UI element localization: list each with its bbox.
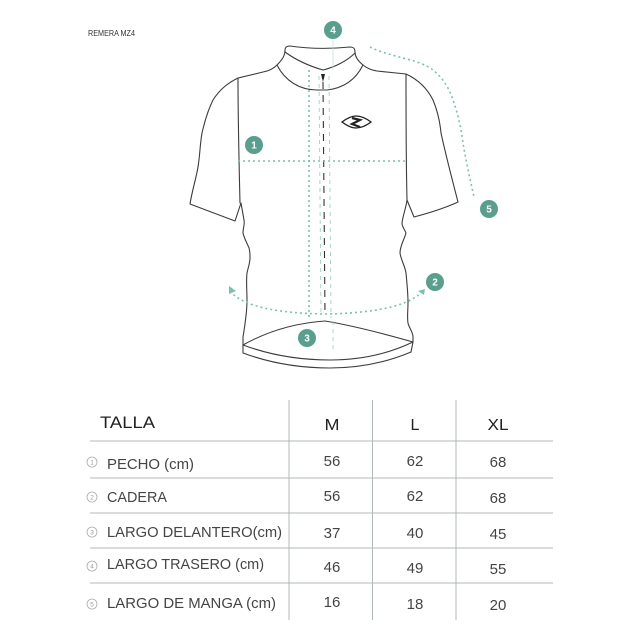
row 5: largo de manga: 16	[324, 594, 340, 611]
badge 5: 5	[486, 204, 492, 216]
row 2: cadera	[87, 488, 506, 507]
row 3: largo delantero: 45	[490, 526, 506, 543]
row 4: largo trasero	[87, 557, 506, 578]
badge 2	[426, 273, 444, 291]
row 4: largo trasero: LARGO TRASERO (cm)	[107, 557, 264, 573]
row 2: cadera: 68	[490, 490, 506, 507]
zipper	[319, 74, 333, 352]
row 5: largo de manga: 5	[90, 602, 94, 608]
header row: XL	[488, 417, 509, 434]
row 3: largo delantero	[87, 525, 506, 543]
measure 4: back length line	[332, 40, 334, 70]
row 3: largo delantero: 37	[324, 525, 340, 542]
badge 4	[324, 21, 342, 39]
badge 2: 2	[432, 278, 438, 288]
measure 2: hip arc with arrows	[229, 286, 425, 314]
badge 4: 4	[330, 26, 336, 36]
row 1: pecho	[87, 453, 506, 473]
row 1: pecho: 62	[407, 453, 423, 470]
row 1: pecho: PECHO (cm)	[107, 457, 194, 473]
measure 3: front length line	[308, 70, 310, 318]
row 4: largo trasero: 46	[324, 559, 340, 576]
row 1: pecho: 56	[324, 453, 340, 470]
header row: M	[324, 417, 340, 434]
header row: L	[411, 417, 420, 434]
table grid	[90, 400, 553, 620]
logo	[342, 116, 371, 128]
measure 1: chest line	[238, 160, 405, 162]
row 5: largo de manga: 18	[407, 596, 423, 613]
badge 1: 1	[251, 140, 257, 152]
size table	[87, 400, 553, 620]
row 5: largo de manga: 20	[490, 597, 506, 614]
header row: TALLA	[100, 413, 156, 432]
row 5: largo de manga: LARGO DE MANGA (cm)	[107, 596, 276, 612]
row 1: pecho: 68	[490, 454, 506, 471]
row 4: largo trasero: 55	[490, 561, 506, 578]
row 5: largo de manga	[87, 594, 506, 614]
row 2: cadera: 62	[407, 488, 423, 505]
row 3: largo delantero: 40	[407, 525, 423, 542]
title: REMERA MZ4	[88, 28, 135, 38]
badge 3: 3	[304, 334, 310, 344]
row 2: cadera: 2	[90, 494, 94, 502]
badge 1	[245, 136, 263, 154]
row 2: cadera: 56	[324, 488, 340, 505]
jersey outline	[190, 46, 458, 368]
row 2: cadera: CADERA	[107, 490, 167, 506]
badge 5	[480, 200, 498, 218]
header row	[100, 413, 509, 434]
measure 5: sleeve length line	[370, 47, 474, 197]
row 1: pecho: 1	[90, 460, 94, 466]
row 4: largo trasero: 49	[407, 560, 423, 577]
row 3: largo delantero: LARGO DELANTERO(cm)	[107, 525, 282, 541]
jersey diagram	[190, 21, 498, 368]
row 4: largo trasero: 4	[90, 564, 94, 570]
badge 3	[298, 329, 316, 347]
row 3: largo delantero: 3	[90, 530, 94, 536]
